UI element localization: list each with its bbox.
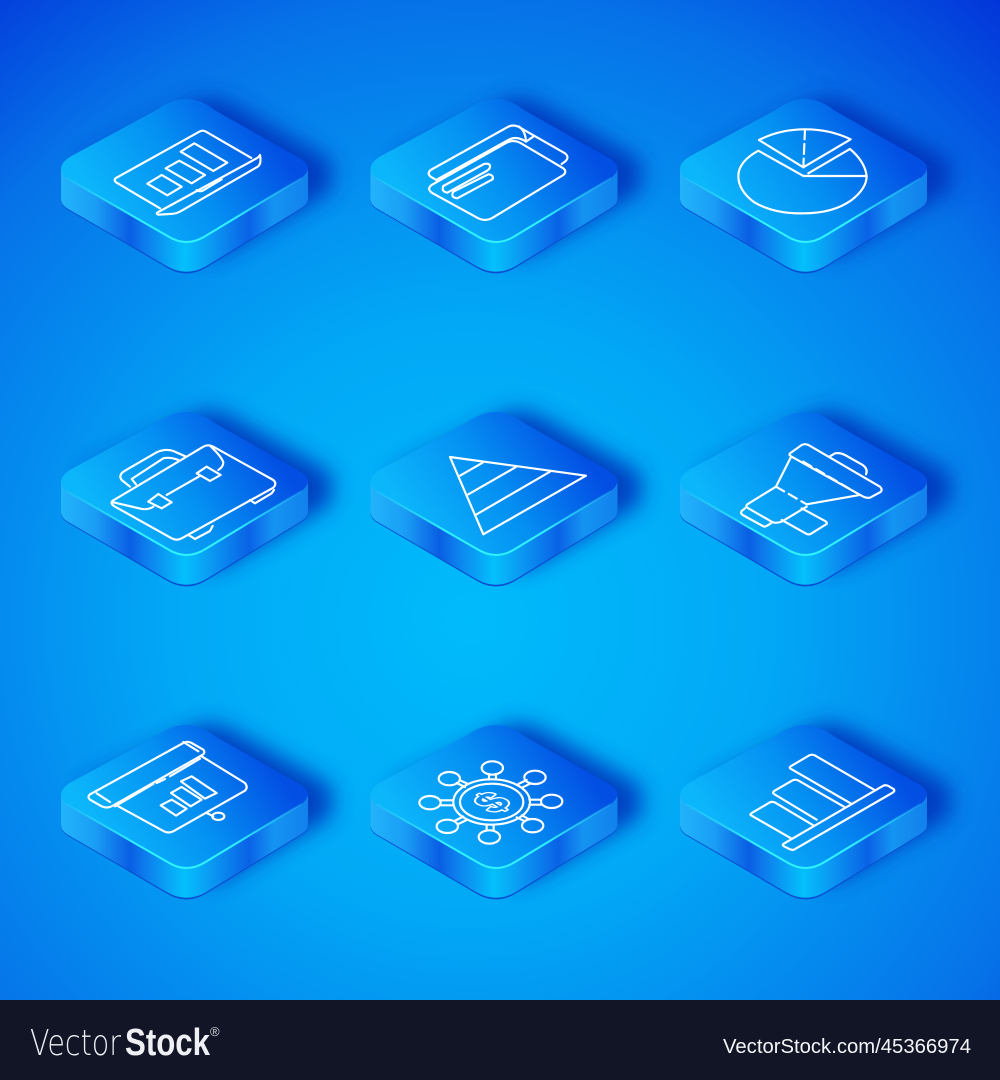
tile: folder bbox=[370, 98, 642, 274]
icon: folder with text lines bbox=[429, 125, 567, 220]
icon: pyramid chart bbox=[450, 457, 586, 534]
icon: dollar network: $ bbox=[465, 786, 520, 819]
tile: pyramid bbox=[370, 411, 642, 586]
tile: laptop chart bbox=[61, 98, 332, 274]
icon: briefcase bbox=[112, 445, 275, 540]
tile: money network bbox=[370, 724, 642, 900]
icon: pie chart with wedge bbox=[738, 129, 867, 213]
footer logo: Vector bbox=[30, 1023, 121, 1064]
footer logo: ® bbox=[210, 1024, 220, 1039]
icon: presentation board bbox=[88, 742, 247, 832]
tile: briefcase bbox=[61, 411, 332, 586]
footer logo: Stock bbox=[125, 1022, 211, 1064]
icon: laptop with bars bbox=[115, 131, 261, 215]
tile: presentation board bbox=[61, 724, 332, 900]
icon: dollar network bbox=[419, 761, 562, 844]
tile: bar chart bbox=[680, 724, 951, 900]
tile: pie chart bbox=[680, 98, 951, 274]
footer image id: VectorStock.com/45366974 bbox=[723, 1036, 971, 1058]
tile: funnel bbox=[680, 411, 951, 586]
icon: horizontal bar chart bbox=[750, 755, 894, 850]
footer logo bbox=[30, 1022, 220, 1064]
icon: sales funnel bbox=[741, 444, 882, 534]
footer bar bbox=[0, 1000, 1000, 1080]
